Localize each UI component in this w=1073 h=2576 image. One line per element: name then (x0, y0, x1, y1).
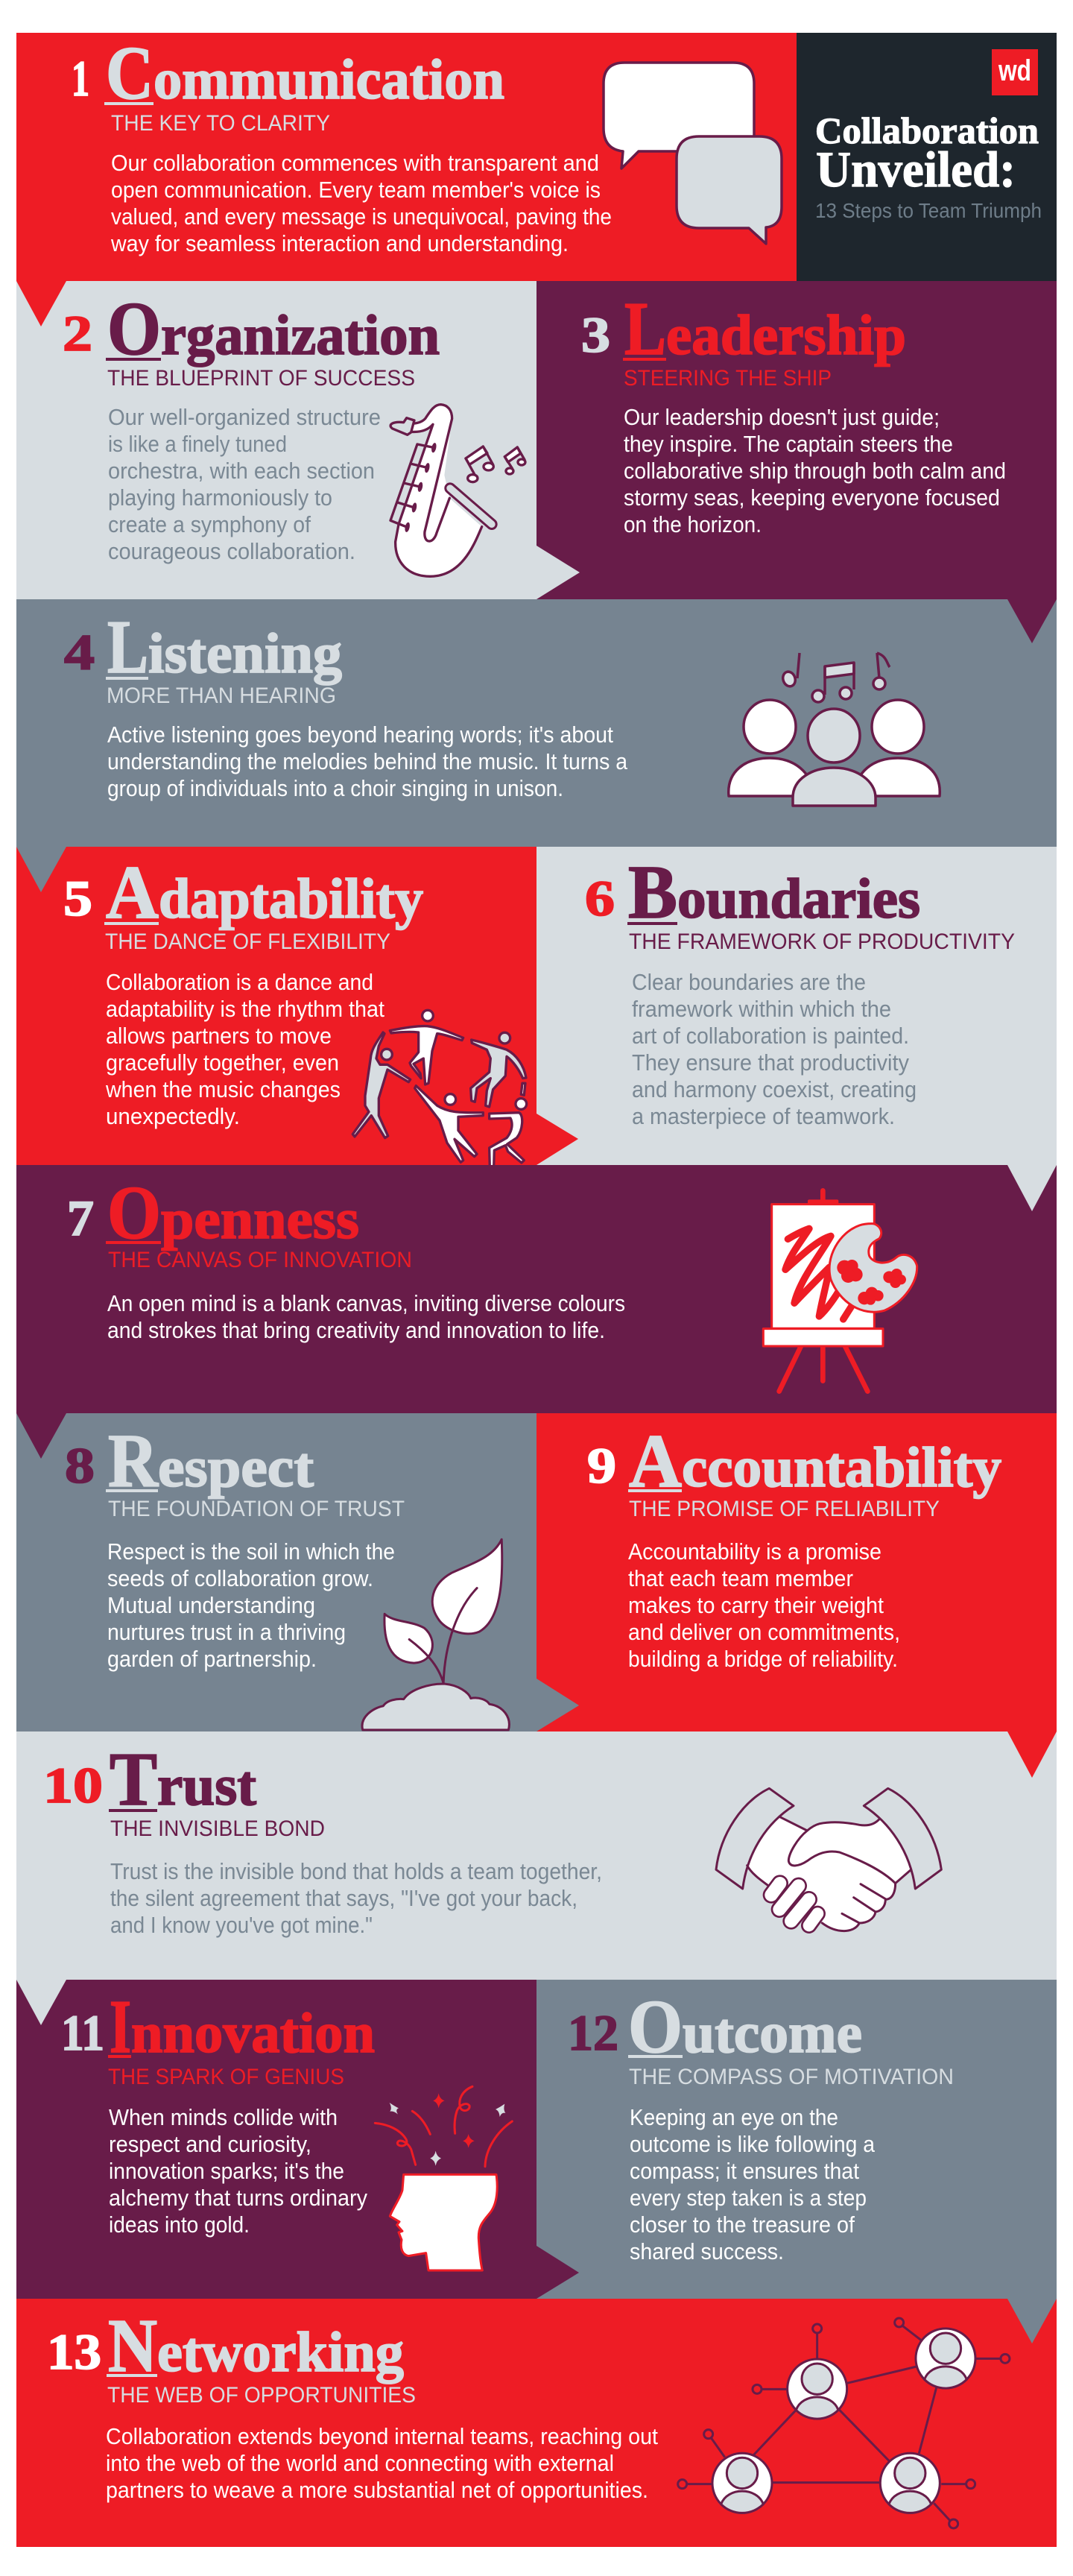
heading: Openness: penness (161, 1188, 359, 1251)
heading: Accountability: ccountability (682, 1436, 1001, 1499)
subtitle: THE INVISIBLE BOND (110, 1816, 325, 1841)
body text: respect and curiosity, (109, 2131, 311, 2157)
panel: 12 outcome (536, 1980, 1057, 2299)
pointer from panel 11 (536, 2246, 579, 2299)
body text: valued, and every message is unequivocal, paving the (111, 203, 612, 230)
body text: and strokes that bring creativity and innovation to life. (107, 1317, 605, 1343)
body text (109, 2104, 367, 2238)
body text (108, 404, 381, 564)
step number 4: 4 (64, 624, 95, 681)
body text: way for seamless interaction and understanding. (110, 230, 569, 256)
body text: outcome is like following a (630, 2131, 876, 2157)
body text: Our well-organized structure (108, 404, 381, 430)
heading: Respect (106, 1419, 314, 1503)
heading: Communication (104, 31, 504, 116)
body text: nurtures trust in a thriving (107, 1619, 346, 1645)
panel: 1 communication (16, 31, 797, 281)
pointer from panel 6 (1007, 1165, 1057, 1211)
heading: Outcome: utcome (683, 2002, 862, 2065)
icon: people network (678, 2318, 1010, 2528)
subtitle: THE DANCE OF FLEXIBILITY (105, 929, 390, 954)
body text: makes to carry their weight (628, 1592, 884, 1618)
heading: Boundaries (627, 850, 920, 935)
body text: understanding the melodies behind the music. It turns a (107, 748, 628, 774)
body text: alchemy that turns ordinary (109, 2185, 367, 2211)
body text (110, 150, 612, 256)
body text: When minds collide with (109, 2104, 338, 2130)
step number 10: 10 (43, 1757, 103, 1813)
panel: 2 organization (16, 281, 536, 599)
body text: that each team member (628, 1565, 853, 1591)
step number 7: 7 (67, 1190, 94, 1246)
body text: and deliver on commitments, (628, 1619, 900, 1645)
body text (107, 722, 628, 801)
body text: every step taken is a step (630, 2185, 867, 2211)
heading: Leadership: L (624, 287, 666, 371)
heading: Adaptability: A (106, 850, 159, 935)
panel: 3 leadership (536, 281, 1057, 599)
body text: Collaboration extends beyond internal teams, reaching out (106, 2423, 658, 2449)
body text: Respect is the soil in which the (107, 1538, 395, 1565)
step number 12: 12 (568, 2004, 618, 2061)
heading: Networking (107, 2304, 404, 2388)
heading: Organization (106, 287, 440, 371)
step number 5: 5 (63, 870, 92, 926)
step number 6: 6 (585, 870, 615, 926)
heading: Innovation: I (110, 1985, 131, 2069)
body text (632, 969, 917, 1129)
body text: partners to weave a more substantial net of opportunities. (106, 2477, 648, 2503)
body text: gracefully together, even (106, 1049, 339, 1076)
icon: sprouting plant (362, 1539, 509, 1730)
panel: 11 innovation (16, 1980, 536, 2299)
panel: title (797, 33, 1057, 281)
body text (624, 404, 1006, 537)
heading: Respect: R (108, 1419, 159, 1503)
title (815, 110, 1039, 198)
step number 2: 2 (63, 305, 92, 362)
panel: 13 networking (16, 2299, 1057, 2547)
subtitle: 13 Steps to Team Triumph (815, 199, 1042, 222)
title: Unveiled: (816, 141, 1016, 198)
step number 8: 8 (65, 1437, 95, 1494)
pointer from panel 10 (16, 1980, 66, 2025)
heading: Leadership (623, 287, 906, 371)
panel: 4 listening (16, 599, 1057, 847)
heading: Boundaries: B (628, 850, 677, 935)
body text: group of individuals into a choir singing in unison. (107, 775, 563, 801)
heading: Adaptability (104, 850, 423, 935)
heading: Organization: O (107, 287, 161, 371)
body text: innovation sparks; it's the (109, 2158, 344, 2184)
heading: Trust (109, 1737, 256, 1822)
body text: collaborative ship through both calm and (624, 458, 1006, 484)
subtitle: THE FOUNDATION OF TRUST (108, 1497, 405, 1521)
icon: dancers (352, 1010, 527, 1168)
heading: Innovation (108, 1985, 375, 2069)
subtitle: THE COMPASS OF MOTIVATION (629, 2065, 954, 2089)
panel: 8 respect (16, 1413, 536, 1731)
panel: 7 openness (16, 1165, 1057, 1413)
body text (107, 1538, 395, 1672)
logo: wd (992, 49, 1038, 95)
pointer from panel 8 (536, 1679, 579, 1731)
body text: Our collaboration commences with transparent and (111, 150, 599, 176)
subtitle: THE PROMISE OF RELIABILITY (629, 1497, 940, 1521)
body text: allows partners to move (106, 1023, 332, 1049)
heading: Listening (106, 605, 342, 689)
pointer from panel 9 (1007, 1731, 1057, 1778)
body text: stormy seas, keeping everyone focused (624, 484, 1000, 511)
step number 1: 1 (72, 50, 89, 107)
body text: Trust is the invisible bond that holds a team together, (110, 1858, 602, 1884)
body text: playing harmoniously to (108, 484, 332, 511)
body text (630, 2104, 876, 2264)
pointer from panel 5 (536, 1114, 578, 1165)
body text: ideas into gold. (109, 2212, 250, 2238)
body text: the silent agreement that says, "I've got your back, (110, 1885, 577, 1911)
body text: is like a finely tuned (108, 431, 287, 457)
pointer from panel 2 (536, 546, 580, 599)
body text (105, 969, 384, 1129)
heading: Organization: rganization (161, 304, 440, 367)
icon: handshake (716, 1788, 941, 1931)
body text (628, 1538, 900, 1672)
step number 9: 9 (587, 1437, 616, 1494)
body text: Keeping an eye on the (630, 2104, 838, 2130)
body text: into the web of the world and connecting with external (106, 2450, 614, 2476)
body text: seeds of collaboration grow. (107, 1565, 373, 1591)
body text: they inspire. The captain steers the (624, 431, 953, 457)
panel: 10 trust (16, 1731, 1057, 1980)
body text: courageous collaboration. (108, 538, 355, 564)
icon: choir singing (729, 653, 940, 806)
body text: framework within which the (632, 996, 891, 1022)
heading: Outcome (628, 1985, 862, 2069)
heading: Networking: N (108, 2304, 157, 2388)
body text: Mutual understanding (107, 1592, 315, 1618)
panel: 5 adaptability (16, 847, 536, 1168)
step number 13: 13 (47, 2323, 101, 2380)
subtitle: THE WEB OF OPPORTUNITIES (107, 2383, 416, 2408)
heading: Innovation: nnovation (131, 2002, 375, 2065)
icon: speech bubbles (604, 63, 782, 244)
body text (110, 1858, 602, 1938)
pointer from panel 4 (16, 847, 66, 892)
heading: Listening: L (107, 605, 148, 689)
body text: Collaboration is a dance and (106, 969, 373, 995)
body text: orchestra, with each section (108, 458, 375, 484)
pointer from panel 3 (1007, 599, 1057, 643)
body text: and I know you've got mine." (110, 1912, 373, 1938)
body text: unexpectedly. (106, 1103, 240, 1129)
body text: compass; it ensures that (630, 2158, 859, 2184)
body text: Accountability is a promise (628, 1538, 881, 1565)
body text: closer to the treasure of (630, 2212, 855, 2238)
body text: shared success. (630, 2238, 784, 2264)
body text: create a symphony of (108, 511, 311, 537)
panel: 6 boundaries (536, 847, 1057, 1165)
heading: Trust: T (110, 1737, 157, 1822)
heading: Accountability: A (629, 1419, 682, 1503)
heading: Openness (106, 1171, 359, 1255)
subtitle: THE SPARK OF GENIUS (108, 2065, 344, 2089)
heading: Trust: rust (157, 1755, 256, 1817)
body text: building a bridge of reliability. (628, 1646, 898, 1672)
body text: garden of partnership. (107, 1646, 317, 1672)
step number 3: 3 (581, 306, 610, 363)
heading: Boundaries: oundaries (677, 868, 920, 930)
body text: adaptability is the rhythm that (106, 996, 384, 1022)
subtitle: THE FRAMEWORK OF PRODUCTIVITY (629, 929, 1015, 954)
subtitle: MORE THAN HEARING (107, 684, 336, 708)
icon: easel and palette (763, 1190, 917, 1392)
step number 11: 11 (61, 2004, 104, 2061)
title: Collaboration (815, 110, 1039, 151)
body text: Clear boundaries are the (632, 969, 866, 995)
body text: open communication. Every team member's voice is (111, 177, 601, 203)
heading: Outcome: O (628, 1985, 683, 2069)
pointer from panel 1 (16, 281, 66, 326)
body text: art of collaboration is painted. (632, 1023, 909, 1049)
body text (106, 2423, 658, 2503)
heading: Listening: istening (148, 622, 342, 685)
subtitle: THE BLUEPRINT OF SUCCESS (107, 366, 415, 391)
heading: Respect: espect (158, 1436, 314, 1499)
heading: Communication: C (106, 31, 153, 116)
subtitle: THE CANVAS OF INNOVATION (108, 1248, 412, 1272)
heading: Accountability (628, 1419, 1001, 1503)
heading: Adaptability: daptability (159, 868, 423, 930)
subtitle: THE KEY TO CLARITY (111, 111, 330, 136)
heading: Communication: ommunication (153, 48, 504, 111)
body text: a masterpiece of teamwork. (632, 1103, 895, 1129)
body text: They ensure that productivity (632, 1049, 909, 1076)
heading: Openness: O (107, 1171, 161, 1255)
icon: head with sparks (375, 2086, 512, 2270)
body text: Our leadership doesn't just guide; (624, 404, 940, 430)
icon: saxophone (390, 405, 525, 576)
pointer from panel 12 (1007, 2299, 1057, 2343)
body text: An open mind is a blank canvas, inviting diverse colours (107, 1290, 625, 1316)
heading: Networking: etworking (157, 2321, 404, 2384)
heading: Leadership: eadership (666, 304, 906, 367)
body text: on the horizon. (624, 511, 762, 537)
body text (107, 1290, 625, 1343)
pointer from panel 7 (16, 1413, 66, 1459)
logo: wd: wd (998, 54, 1031, 87)
body text: Active listening goes beyond hearing words; it's about (107, 722, 613, 748)
subtitle: STEERING THE SHIP (624, 366, 832, 391)
body text: when the music changes (105, 1076, 341, 1102)
body text: and harmony coexist, creating (632, 1076, 917, 1102)
panel: 9 accountability (536, 1413, 1057, 1731)
